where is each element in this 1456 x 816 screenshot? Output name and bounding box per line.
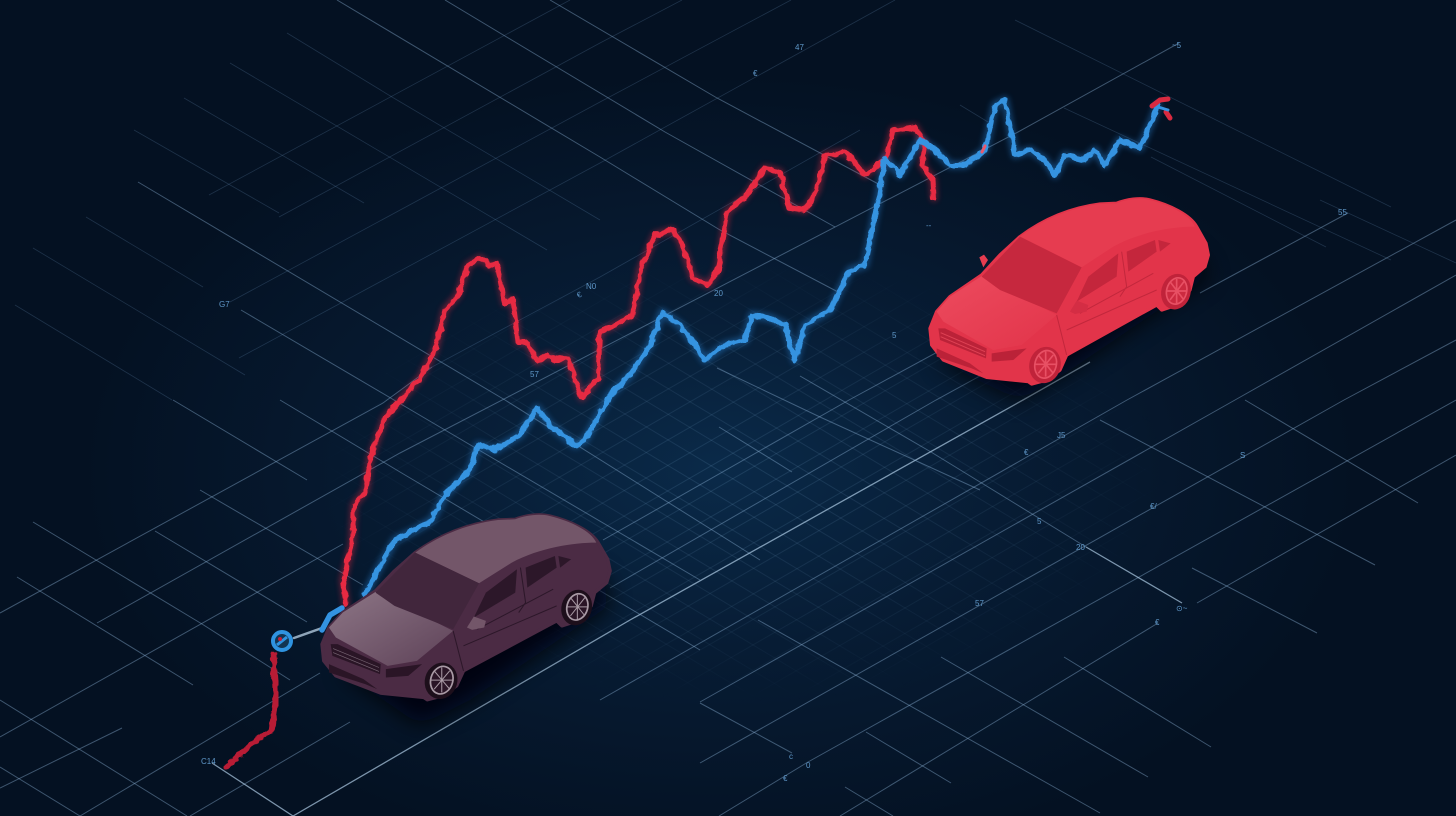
car: red sedan (930, 199, 1208, 387)
tiny axis labels: 47 (795, 43, 804, 52)
front wheel (1025, 343, 1065, 387)
tiny axis labels: 57 (975, 599, 984, 608)
tiny axis labels: 20 (1076, 543, 1085, 552)
red crossing tick (982, 146, 985, 152)
tiny axis labels: c (789, 752, 793, 761)
front wheel (421, 659, 462, 703)
red tip marker (1152, 99, 1170, 118)
blue series (365, 100, 1158, 595)
tiny axis labels: 57 (530, 370, 539, 379)
red line glow (343, 127, 934, 605)
mirrors (467, 617, 486, 630)
body (930, 199, 1208, 384)
line chart (226, 99, 1170, 768)
roof (1020, 199, 1195, 267)
hood (937, 276, 1057, 350)
headlight (992, 348, 1027, 362)
tiny axis labels: € (783, 774, 788, 783)
fine grid mesh (385, 299, 1102, 671)
windshield (376, 553, 479, 629)
tiny axis labels: 0 (806, 761, 811, 770)
tiny axis labels: € (753, 69, 758, 78)
tiny axis labels: S (1240, 451, 1245, 460)
door lines (1057, 252, 1157, 355)
side windows (474, 569, 517, 618)
windshield (982, 237, 1082, 313)
side windows (1077, 253, 1118, 302)
tiny axis labels: G7 (219, 300, 230, 309)
red start segment (226, 655, 276, 768)
tiny axis labels: 5 (892, 331, 897, 340)
tiny axis labels: 5 (1037, 517, 1042, 526)
door lines (453, 568, 557, 671)
tiny axis labels: J5 (1057, 431, 1066, 440)
start marker (273, 632, 291, 650)
tiny axis labels: € (576, 290, 583, 300)
blue stub (322, 608, 342, 630)
tiny axis labels: -- (926, 221, 932, 230)
tiny axis labels: 55 (1338, 208, 1347, 217)
tiny axis labels: 20 (714, 289, 723, 298)
tiny axis labels: €/ (1150, 502, 1157, 511)
lower intake (937, 348, 983, 373)
rear wheel (557, 586, 596, 629)
tiny axis labels: N0 (586, 282, 597, 291)
tiny axis labels (201, 41, 1347, 783)
body (322, 515, 610, 700)
tiny axis labels: C14 (201, 757, 216, 766)
tiny axis labels: ~5 (1172, 41, 1182, 50)
tiny axis labels: ⊙~ (1176, 604, 1188, 613)
roof (415, 515, 596, 583)
headlight (386, 664, 422, 677)
blue line glow (365, 100, 1158, 595)
blue tip (1158, 107, 1168, 110)
tiny axis labels: € (1155, 618, 1160, 627)
hood (329, 592, 453, 666)
tiny axis labels: € (1024, 448, 1029, 457)
red series (343, 127, 934, 605)
car: dark maroon sedan (322, 515, 610, 703)
connector to car (294, 628, 322, 638)
shadow: dark car (340, 570, 610, 725)
shadow: red car (935, 250, 1210, 400)
grille (331, 644, 381, 674)
lower intake (329, 664, 377, 689)
rear wheel (1157, 270, 1195, 313)
mirrors (979, 255, 1088, 314)
grille (938, 328, 987, 358)
